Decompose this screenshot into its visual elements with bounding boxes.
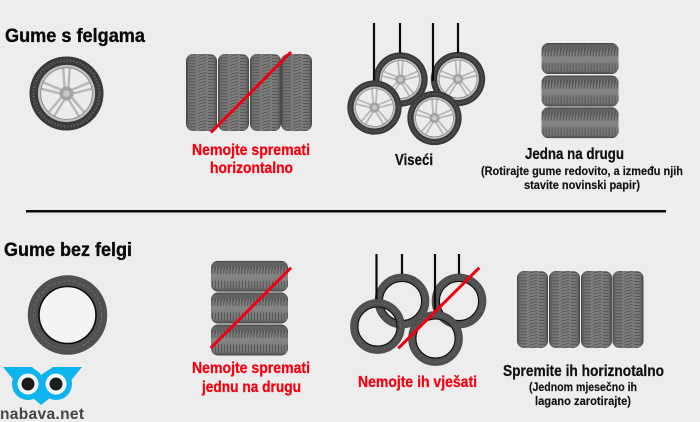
icon: owl [3, 367, 82, 405]
icon: stack of three tyres [211, 261, 288, 356]
label: Spremite ih horiznotalno: Spremite ih horiznotalno [503, 363, 664, 380]
label: warning text [192, 360, 310, 396]
label: Jedna na drugu: stavite novinski papir) [524, 180, 640, 192]
panel: do not hang bare tyres [354, 254, 482, 391]
label: warning text: Nemojte spremati [192, 360, 310, 377]
panel: stacked rimmed tyres [481, 43, 683, 192]
panel: do not store rimmed tyres upright [186, 52, 312, 177]
icon: red cross-out line [398, 268, 479, 348]
label: warning text: horizontalno [210, 160, 293, 177]
icon: four upright tyres [186, 54, 312, 131]
icon: hanging wheels [347, 23, 485, 145]
divider [26, 210, 666, 213]
label: Spremite ih horiznotalno [503, 363, 664, 408]
heading: Gume s felgama: Gume s felgama [5, 26, 145, 47]
label: Spremite ih horiznotalno: lagano zarotirajte) [535, 396, 631, 408]
icon: red cross-out line [211, 52, 291, 132]
icon: red cross-out line [211, 268, 291, 348]
panel: store bare tyres upright [503, 271, 664, 408]
label: Jedna na drugu [481, 146, 683, 192]
icon: wheel with rim [29, 56, 104, 131]
icon: tyre without rim [34, 281, 102, 349]
label: Viseći: Viseći [395, 152, 433, 169]
icon: stack of three tyres [542, 43, 618, 138]
label: Jedna na drugu: Jedna na drugu [525, 146, 624, 163]
icon: hanging tyres [354, 254, 482, 362]
panel: hanging rimmed tyres [347, 23, 485, 169]
logo: nabava.net [0, 367, 84, 422]
label: Jedna na drugu: (Rotirajte gume redovito, a između njih [481, 166, 683, 178]
panel: do not stack bare tyres [192, 261, 310, 396]
label: warning text [192, 142, 310, 177]
label: warning text: jednu na drugu [201, 379, 301, 396]
label: Spremite ih horiznotalno: (Jednom mjesečno ih [529, 382, 637, 394]
icon: four upright tyres [517, 271, 644, 348]
label: warning text: Nemojte ih vješati [358, 374, 477, 391]
heading: Gume bez felgi: Gume bez felgi [4, 240, 132, 261]
label: warning text: Nemojte spremati [192, 142, 310, 159]
